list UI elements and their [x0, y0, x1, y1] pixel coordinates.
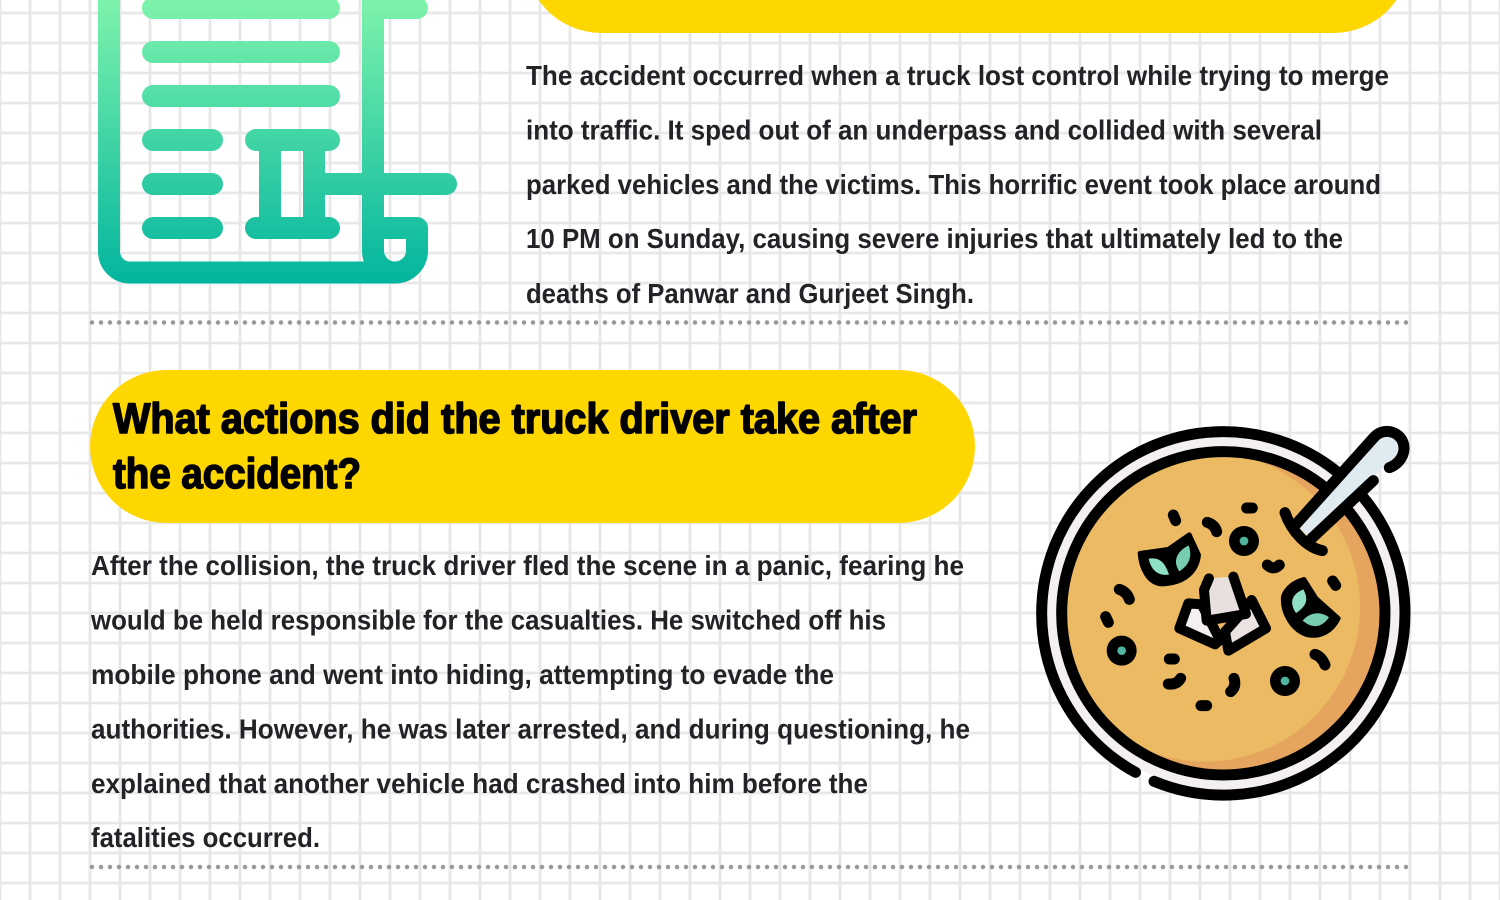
heading: what actions did the truck driver take: [90, 370, 975, 523]
text block: accident description: [526, 60, 1389, 309]
text block: driver actions: [90, 550, 970, 853]
peas: [1107, 526, 1300, 696]
text block: driver actions: explained that another vehicle had crashed into him before the: [91, 768, 868, 799]
icon: legal document: [109, 0, 446, 272]
icon: bowl of soup: [1042, 431, 1405, 795]
heading: what actions did the truck driver take: the accident?: [113, 450, 361, 498]
text block: accident description: deaths of Panwar and Gurjeet Singh.: [526, 278, 974, 309]
text block: accident description: The accident occurred when a truck lost control while trying to merge: [526, 60, 1389, 91]
heading: what actions did the truck driver take: What actions did the truck driver take after: [113, 395, 917, 443]
text block: driver actions: fatalities occurred.: [91, 822, 320, 853]
text block: accident description: 10 PM on Sunday, causing severe injuries that ultimately led to the: [526, 223, 1343, 254]
heading pill: top section: [525, 0, 1410, 33]
text block: driver actions: authorities. However, he was later arrested, and during questioning, he: [91, 714, 970, 744]
text block: driver actions: After the collision, the truck driver fled the scene in a panic, fearing he: [91, 550, 964, 581]
spoon: [1285, 431, 1404, 551]
cheese cubes: [1179, 577, 1266, 651]
text block: accident description: into traffic. It sped out of an underpass and collided with several: [526, 114, 1322, 146]
text block: accident description: parked vehicles and the victims. This horrific event took place around: [526, 169, 1381, 200]
text block: driver actions: would be held responsible for the casualties. He switched off his: [90, 604, 886, 636]
soup garnish specks: [1106, 508, 1336, 706]
herb leaves: [1140, 535, 1338, 635]
text block: driver actions: mobile phone and went into hiding, attempting to evade the: [91, 659, 834, 690]
